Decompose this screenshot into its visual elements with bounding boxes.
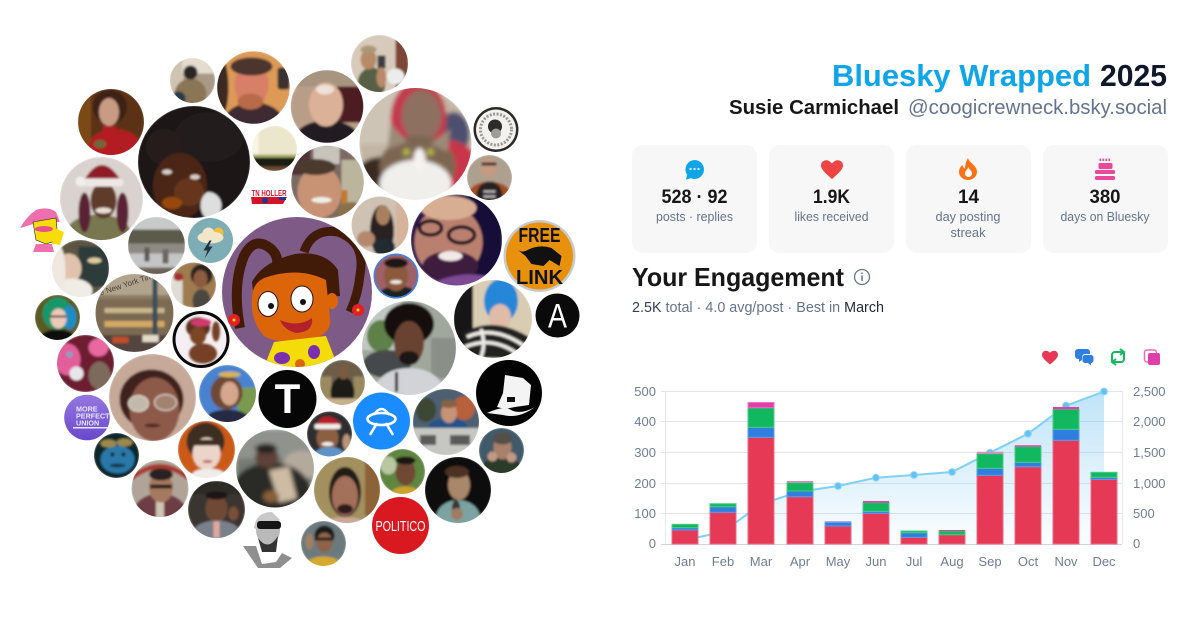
- chart legend icons: [1042, 349, 1160, 366]
- bars: Apr: [787, 481, 813, 544]
- bars: Jan: [672, 524, 698, 544]
- right axis labels: 0: [1133, 536, 1140, 551]
- avatar: woman with glasses and laptop: [171, 262, 216, 308]
- avatar: The Atlantic logo: [536, 294, 580, 338]
- panel: posting streak stat: [906, 145, 1031, 253]
- left axis labels: [634, 384, 656, 551]
- left axis labels: 300: [634, 445, 656, 460]
- avatar: More Perfect Union logo: UNION: [76, 418, 99, 428]
- avatar: woman with blue hair: [453, 279, 533, 361]
- avatar: man in red hoodie with cat: [360, 88, 472, 200]
- icon: speech bubble: [686, 160, 704, 180]
- grid lines: [661, 391, 1122, 544]
- month labels: Nov: [1054, 554, 1078, 569]
- panel: posting streak stat: streak: [950, 225, 986, 240]
- avatar: New York Times T logo: [258, 370, 316, 428]
- avatar: bald man: [290, 70, 364, 143]
- avatar: Rosie illustration: [172, 310, 230, 368]
- month labels: Apr: [790, 554, 811, 569]
- avatar: TN Holler logo: [251, 189, 287, 204]
- right axis labels: 1,500: [1133, 445, 1166, 460]
- avatar: man in suit: [188, 481, 245, 538]
- avatar: pink toys: [54, 334, 114, 392]
- panel: likes stat: 1.9K: [813, 187, 850, 208]
- month labels: Feb: [712, 554, 734, 569]
- icon: flame: [959, 158, 977, 180]
- user name and handle: [729, 96, 1167, 119]
- avatar: man with hands on collar: [479, 428, 524, 473]
- avatar: man in plaid shirt: [132, 460, 188, 517]
- panel: posts and replies stat: posts · replies: [656, 209, 733, 224]
- avatar: More Perfect Union logo: PERFECT: [76, 412, 110, 420]
- avatar: man in profile: [425, 457, 491, 523]
- month labels: Aug: [940, 554, 964, 569]
- panel: posts and replies stat: 528 · 92: [662, 187, 728, 208]
- avatar: New York Times building: [96, 274, 174, 352]
- bars: Feb: [710, 504, 736, 544]
- avatar: Susie Carmichael cartoon: [221, 216, 373, 372]
- avatar: man with long locs: [314, 457, 380, 523]
- icon: reply: [1075, 349, 1094, 366]
- panel: days on Bluesky stat: [1043, 145, 1168, 253]
- avatar: woman in car with yellow top: [301, 521, 346, 566]
- left axis labels: 500: [634, 384, 656, 399]
- month labels: Mar: [750, 554, 773, 569]
- avatar: man with blue ring: [374, 254, 418, 298]
- bars: Jun: [863, 501, 889, 544]
- month labels: Oct: [1018, 554, 1038, 569]
- title: Bluesky Wrapped: [832, 58, 1091, 93]
- icon: repost: [1112, 349, 1124, 365]
- bars: Dec: [1091, 472, 1117, 544]
- panel: days on Bluesky stat: days on Bluesky: [1060, 209, 1150, 224]
- avatar: man in flat cap: [217, 51, 290, 124]
- month labels: Jul: [906, 554, 922, 569]
- right axis labels: [1133, 384, 1166, 551]
- avatar: smiling man on plane: [290, 145, 366, 222]
- right axis labels: 500: [1133, 506, 1155, 521]
- avatar: The Atlantic logo: A: [548, 298, 567, 336]
- avatar: book on shelf: [252, 126, 298, 172]
- left axis labels: 0: [649, 536, 656, 551]
- month labels: [675, 554, 1116, 569]
- avatar: green-haired cartoon woman: [35, 295, 80, 340]
- chart: engagement by month: [634, 384, 1166, 569]
- avatar: sticker with circular text: [474, 107, 518, 152]
- user name and handle: Susie Carmichael: [729, 96, 899, 119]
- cumulative area and line: [685, 388, 1107, 544]
- avatar: woman in red sweater: [78, 89, 144, 155]
- left axis labels: 100: [634, 506, 656, 521]
- bars: Jul: [901, 531, 927, 544]
- icon: cake: [1095, 158, 1115, 180]
- avatar: woman with long hair: [352, 196, 408, 254]
- month labels: Sep: [978, 554, 1002, 569]
- avatar: Politico logo: POLITICO: [376, 518, 426, 535]
- avatar: Free Link button: [504, 220, 576, 292]
- heading: Your Engagement: Your Engagement: [632, 262, 844, 292]
- avatar: Lisa Simpson sticker: [20, 208, 64, 252]
- panel: days on Bluesky stat: 380: [1090, 187, 1120, 208]
- left axis labels: 400: [634, 414, 656, 429]
- avatar: woman outdoors with blue sky: [199, 365, 256, 422]
- bars: Sep: [977, 452, 1003, 544]
- icon: quote: [1144, 350, 1160, 365]
- right axis labels: 2,500: [1133, 384, 1166, 399]
- avatar: lake reflection: [128, 216, 186, 276]
- avatar: selfie with phone and cap: [351, 35, 408, 92]
- avatar: weather icon: [188, 218, 233, 263]
- bars: Nov: [1053, 407, 1079, 544]
- right axis labels: 2,000: [1133, 414, 1166, 429]
- avatar: woman with bangs on orange: [178, 420, 236, 482]
- panel: posting streak stat: day posting: [936, 209, 1000, 224]
- avatar: blue UFO logo: [353, 392, 410, 450]
- panel: likes stat: likes received: [794, 209, 868, 224]
- month labels: May: [826, 554, 851, 569]
- avatar: man on sofa with cat: [236, 430, 314, 508]
- engagement summary: 2.5K total · 4.0 avg/post · Best in March: [632, 300, 884, 316]
- avatar: TN Holler logo: TN HOLLER: [252, 189, 287, 198]
- right axis labels: 1,000: [1133, 476, 1166, 491]
- bars: May: [825, 521, 851, 544]
- avatar: Free Link button: LINK: [516, 267, 564, 289]
- bars: Mar: [748, 402, 774, 544]
- icon: like: [1042, 351, 1058, 364]
- bars: Aug: [939, 530, 965, 544]
- avatar: New York Times T logo: T: [275, 375, 301, 422]
- bars: Oct: [1015, 445, 1041, 544]
- avatar: woman in santa hat: [60, 157, 143, 240]
- month labels: Dec: [1092, 554, 1116, 569]
- panel: likes stat: [769, 145, 894, 253]
- avatar: blue fuzzy monster: [94, 432, 140, 478]
- avatar: man by painting: [52, 240, 109, 297]
- avatar: illustrated woman with afro: [137, 105, 251, 219]
- month labels: Jan: [675, 554, 695, 569]
- panel: posting streak stat: 14: [958, 187, 979, 208]
- user name and handle: @coogicrewneck.bsky.social: [908, 96, 1167, 119]
- avatar: man in front of foliage: [380, 449, 425, 494]
- avatar: sketch of man in sunglasses: [243, 512, 292, 568]
- avatar: ship logo: [476, 360, 542, 426]
- month labels: Jun: [866, 554, 886, 569]
- avatar: man with newspaper: [412, 388, 480, 456]
- avatar: person in wood room: [320, 360, 365, 405]
- avatar: New York Times building: The New York Times: [89, 269, 162, 300]
- avatar: woman in slogan shirt: [467, 155, 512, 200]
- avatar: Free Link button: FREE: [518, 225, 560, 247]
- avatar: bearded man with glasses, purple tint: [410, 194, 502, 290]
- avatar: More Perfect Union logo: [64, 395, 110, 440]
- avatar: mirror selfie: [170, 58, 215, 103]
- avatar: man with afro at chain-link fence: [362, 301, 456, 395]
- icon: info: [854, 270, 870, 284]
- panel: avatar bubble cluster: [20, 34, 580, 574]
- icon: heart: [821, 160, 843, 179]
- avatar: smiling woman in santa hat: [307, 412, 352, 456]
- left axis labels: 200: [634, 476, 656, 491]
- title: 2025: [1100, 58, 1167, 93]
- avatar: Politico logo: [372, 497, 429, 554]
- avatar: More Perfect Union logo: MORE: [76, 404, 98, 414]
- avatar: woman with clear glasses: [108, 354, 196, 442]
- panel: posts and replies stat: [632, 145, 757, 253]
